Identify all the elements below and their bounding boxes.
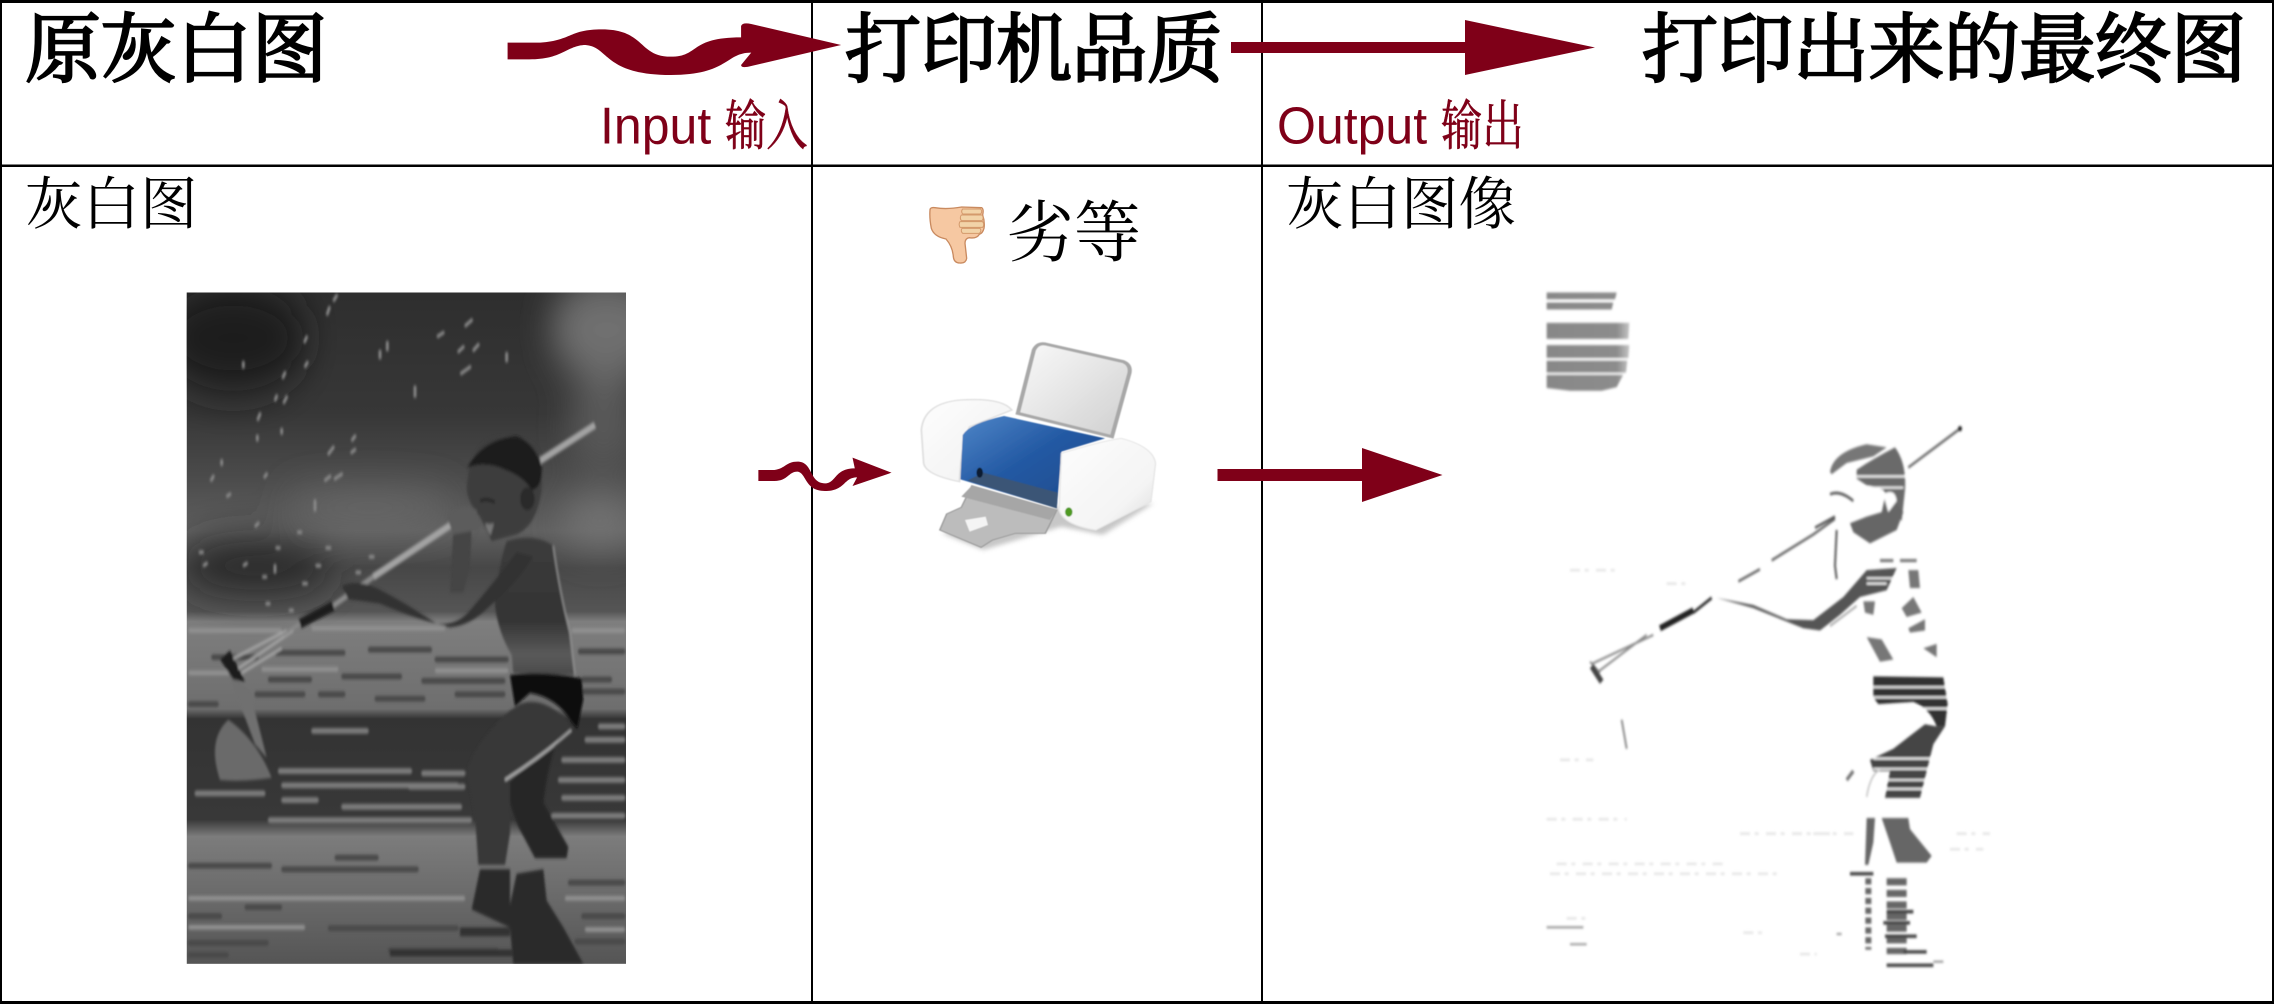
shorts — [1873, 676, 1948, 726]
heading: original grayscale image: 原灰白图 — [25, 9, 327, 93]
shorts — [510, 673, 583, 729]
arrow: small wavy arrow — [758, 458, 892, 491]
icon: thumbs down — [929, 206, 985, 264]
heading: printer quality: 打印机品质 — [845, 9, 1222, 93]
pole — [373, 425, 595, 577]
water ripples bright in dark reflection — [197, 726, 623, 820]
heading: final printed image: 打印出来的最终图 — [1642, 9, 2246, 93]
pole — [1738, 429, 1960, 581]
droplets — [200, 296, 507, 610]
face — [1850, 490, 1903, 543]
label: output — [1277, 97, 1524, 157]
legs in water — [1865, 818, 1932, 865]
legs — [510, 743, 570, 860]
label: input — [600, 97, 808, 157]
torso patches — [1863, 559, 1937, 662]
label: output: 输出 — [1441, 97, 1524, 157]
head — [466, 456, 542, 542]
photo: poor-quality printed image — [1545, 290, 1990, 969]
icon: printer — [920, 342, 1156, 552]
arrow: wavy input arrow — [508, 23, 841, 75]
reflections — [472, 869, 583, 964]
spray splash — [215, 720, 272, 781]
water ripples dark — [190, 650, 623, 955]
white scan streaks — [1547, 301, 1948, 789]
label: input: 输入 — [725, 97, 808, 157]
rake head — [232, 676, 267, 758]
text: inferior: 劣等 — [1007, 197, 1141, 271]
boy: back arm — [450, 530, 472, 592]
printed sky fragment — [1547, 292, 1629, 391]
text: grayscale image caption: 灰白图 — [25, 174, 198, 237]
front arm — [342, 552, 533, 627]
torso — [495, 538, 575, 675]
arm — [1717, 568, 1897, 630]
hair — [1830, 444, 1887, 474]
photo: original grayscale image — [186, 292, 626, 964]
label: input: Input — [600, 97, 711, 155]
hand top — [448, 509, 477, 534]
text: grayscale image caption, output: 灰白图像 — [1286, 174, 1516, 237]
label: output: Output — [1277, 97, 1427, 155]
water speckle — [1547, 570, 1990, 954]
